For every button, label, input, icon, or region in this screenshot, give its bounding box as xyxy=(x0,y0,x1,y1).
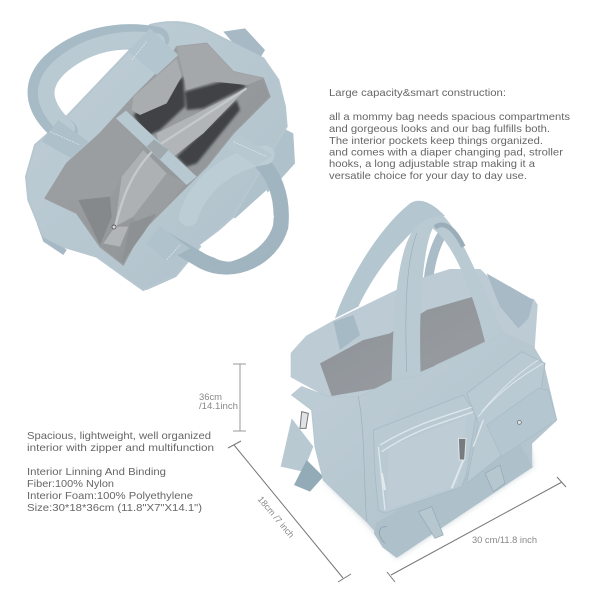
front-view bag photo xyxy=(281,201,557,558)
top-view bag photo xyxy=(26,22,295,290)
front handle xyxy=(392,216,503,381)
bottom left specification text: Spacious, lightweight, well organized xyxy=(27,430,211,442)
floor shadow xyxy=(323,447,533,558)
upper handle xyxy=(40,37,157,132)
top right description text: Large capacity&smart construction: xyxy=(329,87,506,99)
top right description text: and comes with a diaper changing pad, stroller xyxy=(329,146,564,158)
side seam xyxy=(358,397,367,522)
dark pocket shadows xyxy=(133,77,247,167)
white stitching xyxy=(50,42,267,260)
interior lining xyxy=(320,297,485,396)
changing pad roll xyxy=(375,443,532,557)
top right description text: hooks, a long adjustable strap making it a xyxy=(329,158,535,170)
height dimension xyxy=(199,364,246,431)
bottom left specification text: Interior Linning And Binding xyxy=(27,466,166,478)
bottom left specification text: Interior Foam:100% Polyethylene xyxy=(27,490,193,502)
width dimension: 30 cm/11.8 inch xyxy=(472,535,537,545)
bottom left specification text: interior with zipper and multifunction xyxy=(27,442,214,454)
top right description text: all a mommy bag needs spacious compartments xyxy=(329,111,570,123)
interior folds xyxy=(45,43,263,263)
depth dimension: 18cm /7 inch xyxy=(256,494,296,540)
upper handle webbing xyxy=(128,28,178,75)
bottom left specification text xyxy=(27,430,214,514)
top right description text: and gorgeous looks and our bag fulfills both. xyxy=(329,123,550,135)
top right description text: The interior pockets keep things organized. xyxy=(329,135,543,147)
handle opening xyxy=(200,190,274,262)
back wall and rim xyxy=(292,270,537,397)
top right description text xyxy=(329,87,570,182)
bag body xyxy=(26,22,287,290)
height dimension: /14.1inch xyxy=(199,401,238,411)
shoulder strap xyxy=(281,412,323,492)
width dimension xyxy=(387,477,566,582)
bottom left specification text: Fiber:100% Nylon xyxy=(27,478,114,490)
zipper xyxy=(115,88,247,227)
far handle xyxy=(428,235,442,280)
bottom left specification text: Size:30*18*36cm (11.8"X7"X14.1") xyxy=(27,502,202,514)
top right description text: versatile choice for your day to day use. xyxy=(329,170,527,182)
front panel xyxy=(292,333,557,555)
lower handle webbing xyxy=(227,135,273,167)
interior lining xyxy=(45,43,270,265)
right front pocket xyxy=(467,352,545,483)
depth dimension xyxy=(228,441,351,582)
side straps and pockets behind body xyxy=(37,28,295,290)
near back handle webbing xyxy=(333,315,360,350)
height dimension: 36cm xyxy=(199,392,222,402)
centre strap xyxy=(116,111,197,185)
left front pocket xyxy=(373,395,476,513)
pocket flap with snap xyxy=(487,388,557,457)
near back handle xyxy=(335,201,445,318)
lower handle xyxy=(163,152,281,267)
